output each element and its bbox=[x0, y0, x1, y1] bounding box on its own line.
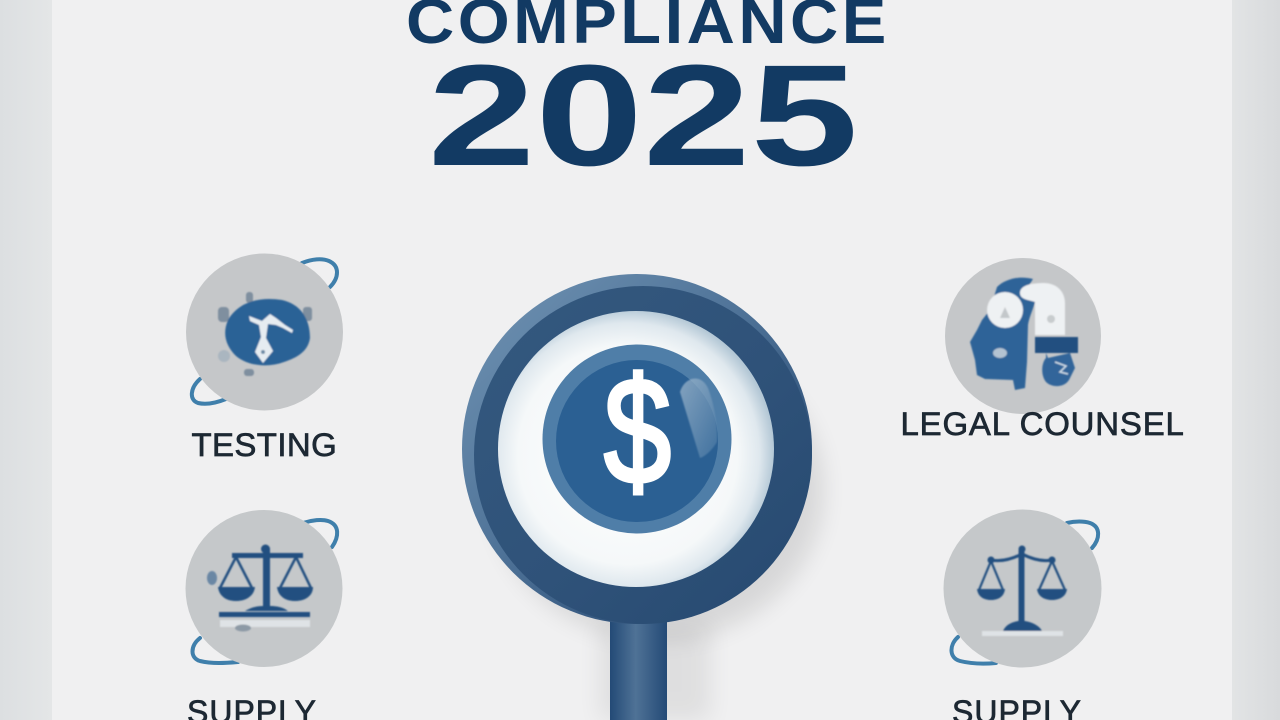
grey disc bbox=[945, 258, 1101, 414]
orbit arcs bbox=[951, 522, 1098, 664]
orbit arcs bbox=[192, 520, 337, 663]
label: TESTING bbox=[192, 427, 337, 463]
icon: figure with tie bbox=[218, 292, 312, 376]
item: supply right bbox=[944, 510, 1102, 720]
magnifying glass bbox=[462, 274, 823, 720]
item: supply left bbox=[186, 510, 342, 720]
grey disc bbox=[944, 510, 1102, 668]
orbit arcs bbox=[192, 259, 337, 404]
icon: balance scale bbox=[207, 544, 313, 632]
icon: balance scale bbox=[977, 546, 1067, 636]
heading: year: 2025 bbox=[428, 36, 858, 196]
item: legal counsel bbox=[900, 258, 1185, 442]
coin highlight bbox=[680, 378, 717, 458]
grey disc bbox=[186, 254, 343, 410]
light strip bbox=[982, 631, 1063, 636]
handle bbox=[610, 615, 667, 720]
lens glass bbox=[498, 311, 774, 587]
label: LEGAL COUNSEL bbox=[900, 406, 1185, 442]
dollar sign: $ bbox=[604, 346, 671, 515]
outer rim bbox=[462, 274, 812, 624]
handle shadow bbox=[600, 625, 710, 720]
icon: counsel figures bbox=[970, 278, 1078, 390]
drop shadow bbox=[493, 340, 823, 640]
title bbox=[406, 0, 890, 196]
light strip bbox=[220, 620, 310, 627]
grey disc bbox=[186, 510, 342, 667]
dark ring bbox=[474, 286, 812, 624]
item: testing bbox=[186, 254, 343, 463]
coin bbox=[542, 344, 732, 534]
